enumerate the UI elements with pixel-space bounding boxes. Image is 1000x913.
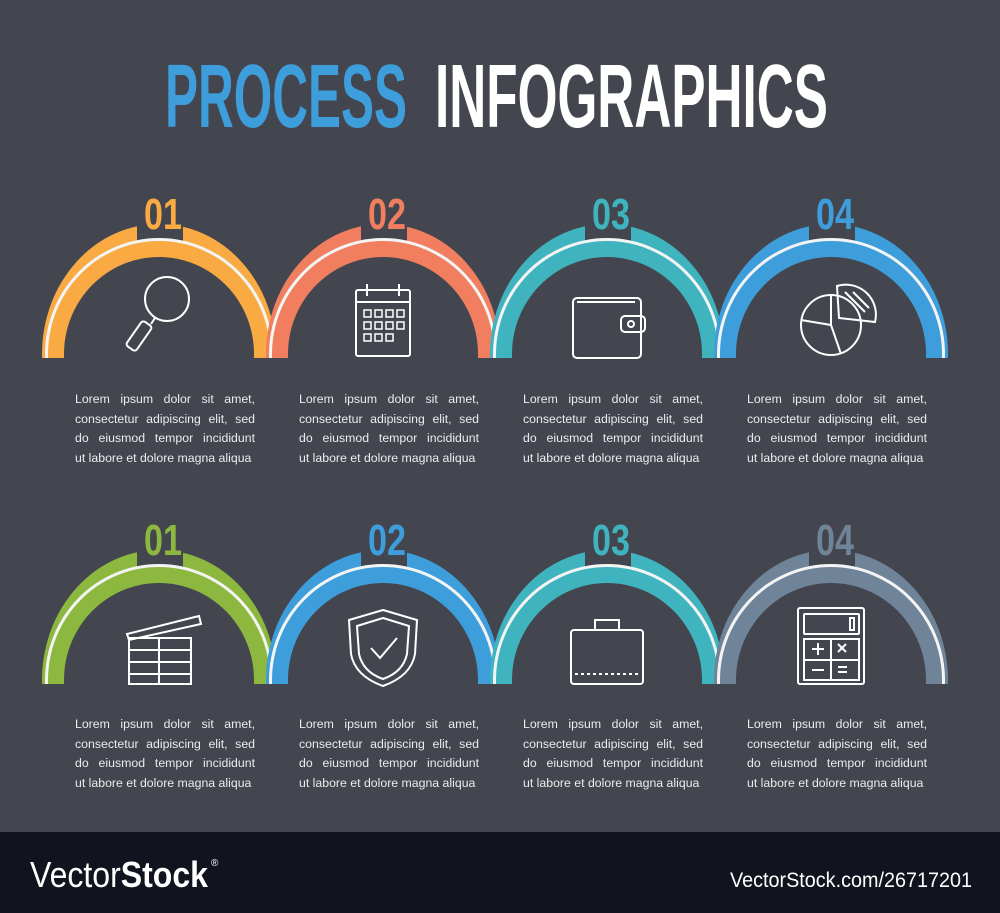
text: step1 row1: Lorem ipsum dolor sit amet, [75, 392, 255, 406]
icon: pie chart [801, 285, 876, 355]
text: step1 row1: do eiusmod tempor incididunt [75, 431, 255, 445]
text: step3 row1 [523, 392, 703, 465]
step 3 row1 teal: 03 [592, 190, 630, 239]
title [165, 47, 828, 147]
text: step3 row2 [523, 717, 703, 790]
text: step1 row1: consectetur adipiscing elit, sed [75, 412, 255, 426]
icon: calculator [798, 608, 864, 684]
icon: shield [349, 610, 417, 686]
text: step4 row2 [747, 717, 927, 790]
text: step3 row2: consectetur adipiscing elit, sed [523, 737, 703, 751]
text: step3 row1: consectetur adipiscing elit, sed [523, 412, 703, 426]
step 1 row1 orange: 01 [144, 190, 182, 239]
text: step2 row1: consectetur adipiscing elit, sed [299, 412, 479, 426]
icon: calendar [356, 284, 410, 356]
text: step2 row1 [299, 392, 479, 465]
text: step2 row1: Lorem ipsum dolor sit amet, [299, 392, 479, 406]
text: step2 row2: consectetur adipiscing elit, sed [299, 737, 479, 751]
step 1 row2 green [42, 524, 271, 685]
step 2 row2 blue: 02 [368, 516, 406, 565]
step 4 row1 blue: 04 [816, 190, 854, 239]
step 2 row1 salmon: 02 [368, 190, 406, 239]
footer bar: VectorStock.com/26717201 [730, 869, 972, 892]
text: step4 row2: Lorem ipsum dolor sit amet, [747, 717, 927, 731]
step 1 row1 orange [42, 198, 271, 358]
step 3 row2 teal [490, 524, 719, 685]
text: step4 row1 [747, 392, 927, 465]
step 4 row2 slate: 04 [816, 516, 854, 565]
text: step2 row2 [299, 717, 479, 790]
text: step1 row2: Lorem ipsum dolor sit amet, [75, 717, 255, 731]
text: step2 row2: ut labore et dolore magna aliqua [299, 776, 475, 790]
text: step2 row2: Lorem ipsum dolor sit amet, [299, 717, 479, 731]
step 2 row2 blue [266, 524, 495, 687]
step 3 row1 teal [490, 198, 719, 359]
text: step4 row2: do eiusmod tempor incididunt [747, 756, 927, 770]
text: step4 row2: ut labore et dolore magna aliqua [747, 776, 923, 790]
step 4 row2 slate [714, 524, 948, 685]
text: step1 row2: consectetur adipiscing elit, sed [75, 737, 255, 751]
text: step4 row2: consectetur adipiscing elit, sed [747, 737, 927, 751]
text: step4 row1: consectetur adipiscing elit, sed [747, 412, 927, 426]
text: step3 row2: do eiusmod tempor incididunt [523, 756, 703, 770]
icon: wallet [573, 298, 645, 358]
step 1 row2 green: 01 [144, 516, 182, 565]
text: step1 row2: ut labore et dolore magna aliqua [75, 776, 251, 790]
text: step4 row1: do eiusmod tempor incididunt [747, 431, 927, 445]
icon: magnifier [125, 277, 189, 352]
text: step3 row1: Lorem ipsum dolor sit amet, [523, 392, 703, 406]
step 3 row2 teal: 03 [592, 516, 630, 565]
footer bar: VectorStock [30, 854, 209, 895]
footer bar [0, 832, 1000, 913]
footer bar: ® [211, 858, 219, 869]
text: step1 row1 [75, 392, 255, 465]
text: step1 row1: ut labore et dolore magna aliqua [75, 451, 251, 465]
text: step3 row2: Lorem ipsum dolor sit amet, [523, 717, 703, 731]
text: step3 row1: do eiusmod tempor incididunt [523, 431, 703, 445]
text: step3 row2: ut labore et dolore magna aliqua [523, 776, 699, 790]
icon: briefcase [571, 620, 643, 684]
text: step4 row1: Lorem ipsum dolor sit amet, [747, 392, 927, 406]
title: PROCESS [165, 47, 407, 147]
text: step4 row1: ut labore et dolore magna aliqua [747, 451, 923, 465]
icon: clapperboard [127, 616, 201, 684]
text: step3 row1: ut labore et dolore magna aliqua [523, 451, 699, 465]
text: step2 row1: ut labore et dolore magna aliqua [299, 451, 475, 465]
text: step2 row1: do eiusmod tempor incididunt [299, 431, 479, 445]
text: step1 row2: do eiusmod tempor incididunt [75, 756, 255, 770]
step 4 row1 blue [714, 198, 948, 358]
text: step2 row2: do eiusmod tempor incididunt [299, 756, 479, 770]
text: step1 row2 [75, 717, 255, 790]
step 2 row1 salmon [266, 198, 495, 358]
